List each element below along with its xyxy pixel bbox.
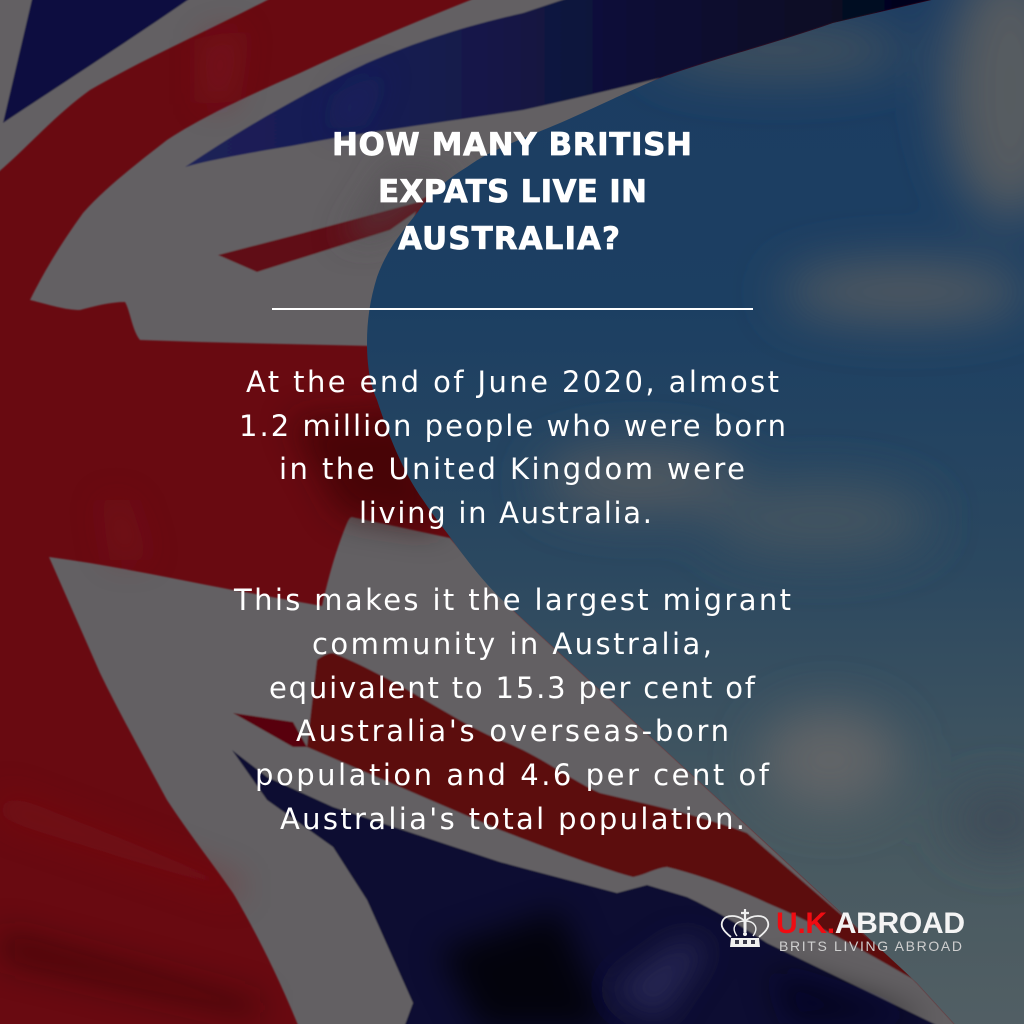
text block: second paragraph: This makes it the largest migrant: [233, 583, 791, 617]
text block: second paragraph: [233, 583, 791, 836]
text block: second paragraph: population and 4.6 per cent of: [255, 758, 770, 792]
flag white top left corner: [0, 0, 277, 175]
text block: first paragraph: in the United Kingdom were: [279, 452, 745, 486]
flag navy upper band: [185, 0, 953, 167]
text block: first paragraph: 1.2 million people who were born: [239, 409, 786, 443]
title: [332, 127, 692, 257]
icon: crown: [722, 909, 768, 947]
sky: [340, 0, 1024, 1024]
title: HOW MANY BRITISH: [332, 127, 692, 163]
flag navy top left: [3, 0, 195, 123]
text block: second paragraph: Australia's total population.: [280, 802, 745, 836]
text block: second paragraph: equivalent to 15.3 per cent of: [269, 671, 756, 705]
flag small red stripe upper: [218, 197, 437, 272]
logo wordmark: U.K.ABROAD: [776, 907, 965, 940]
divider line: [272, 308, 753, 310]
text block: first paragraph: [239, 365, 786, 530]
title: EXPATS LIVE IN: [378, 174, 647, 210]
text block: first paragraph: living in Australia.: [359, 496, 652, 530]
flag small red sliver lower: [233, 713, 307, 747]
flag lower red stripe: [307, 653, 920, 983]
flag white lower wedge: [49, 517, 960, 1024]
text block: second paragraph: Australia's overseas-born: [296, 714, 729, 748]
text block: second paragraph: community in Australia,: [312, 627, 712, 661]
flag lower navy: [232, 750, 947, 1024]
title: AUSTRALIA?: [398, 221, 620, 257]
flag white upper band: [30, 0, 660, 346]
logo: U.K. Abroad: [722, 907, 965, 954]
logo tagline: BRITS LIVING ABROAD: [779, 938, 962, 954]
clouds: [540, 0, 1024, 850]
text block: first paragraph: At the end of June 2020, almost: [246, 365, 779, 399]
